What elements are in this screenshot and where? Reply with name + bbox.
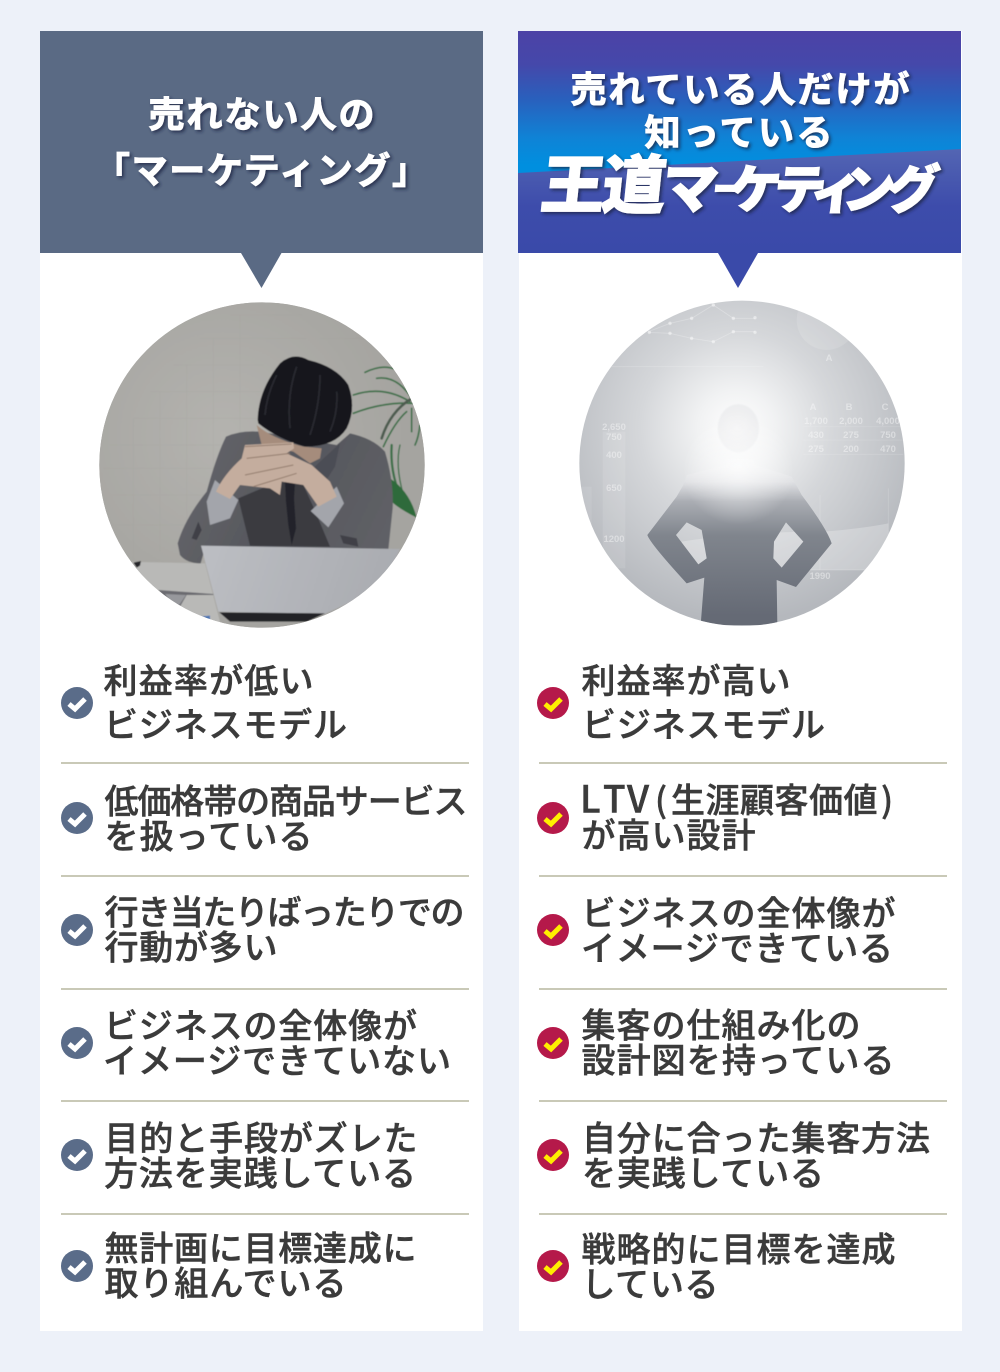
photo: silhouette with data overlay: 2,000 xyxy=(839,416,863,427)
photo: silhouette with data overlay xyxy=(577,290,905,626)
header: successful: ケティング xyxy=(725,149,943,224)
row 6: 戦略的に目標を達成 xyxy=(582,1232,896,1270)
row 2: が高い設計 xyxy=(582,818,756,856)
row 6 xyxy=(61,1230,416,1304)
laptop xyxy=(201,546,400,614)
row 5 xyxy=(537,1120,930,1194)
photo: businessman with head in hands xyxy=(97,302,430,635)
checklist: successful xyxy=(537,663,947,1304)
row 4: 設計図を持っている xyxy=(582,1042,894,1080)
row 2: LTV xyxy=(580,770,650,824)
row 2: (生涯顧客価値) xyxy=(655,774,893,822)
photo: silhouette with data overlay: 1200 xyxy=(603,534,625,545)
header: unsuccessful: 売れない人の xyxy=(148,94,374,135)
photo: silhouette with data overlay: 200 xyxy=(843,444,859,455)
face xyxy=(257,425,322,463)
header: successful: マ xyxy=(658,144,723,225)
header: unsuccessful xyxy=(40,31,483,288)
header: successful: 王道 xyxy=(537,135,672,227)
row 1: ビジネスモデル xyxy=(582,707,825,745)
row 3: イメージできている xyxy=(581,930,893,968)
row 2: を扱っている xyxy=(104,818,312,856)
photo: silhouette with data overlay: A xyxy=(826,353,833,364)
photo: silhouette with data overlay: 400 xyxy=(606,450,622,461)
row 2 xyxy=(537,770,893,856)
row 6 xyxy=(537,1232,896,1304)
hair xyxy=(258,357,352,447)
header: successful: 売れている人だけが xyxy=(570,69,910,110)
photo: silhouette with data overlay: 470 xyxy=(880,444,896,455)
panel: unsuccessful marketing xyxy=(40,31,483,1331)
row 4 xyxy=(61,1008,451,1081)
photo: silhouette with data overlay: 275 xyxy=(808,444,825,455)
row 5: 目的と手段がズレた xyxy=(104,1120,418,1158)
row 6: 無計画に目標達成に xyxy=(104,1230,416,1268)
photo: silhouette with data overlay: 1500 xyxy=(730,571,752,582)
shirt cuffs xyxy=(207,480,238,525)
row 6: 取り組んでいる xyxy=(104,1266,346,1304)
row 4 xyxy=(537,1008,894,1080)
checklist: unsuccessful xyxy=(61,663,469,1304)
photo: silhouette with data overlay: 1,700 xyxy=(804,416,828,427)
row 3 xyxy=(61,894,464,968)
row 3: 行動が多い xyxy=(104,930,278,968)
row 5 xyxy=(61,1120,418,1194)
photo: silhouette with data overlay: 650 xyxy=(606,483,622,494)
row 5: を実践している xyxy=(582,1156,824,1194)
plant xyxy=(353,367,420,495)
row 2: 低価格帯の商品サービス xyxy=(104,784,468,822)
photo: silhouette with data overlay: 430 xyxy=(808,430,824,441)
photo: silhouette with data overlay: 275 xyxy=(843,430,860,441)
row 6: している xyxy=(582,1266,718,1304)
row 2 xyxy=(61,784,468,856)
row 4: ビジネスの全体像が xyxy=(104,1008,417,1046)
suit xyxy=(178,431,393,563)
photo: silhouette with data overlay: 750 xyxy=(606,432,622,443)
header: successful: 知っている xyxy=(644,112,832,153)
photo: silhouette with data overlay: A xyxy=(810,402,817,413)
row 4: 集客の仕組み化の xyxy=(582,1008,860,1046)
silhouette xyxy=(647,484,832,625)
row 1: 利益率が高い xyxy=(582,663,790,701)
hands xyxy=(216,442,337,507)
photo: silhouette with data overlay: 1990 xyxy=(809,571,831,582)
row 3 xyxy=(537,896,896,968)
row 1: 利益率が低い xyxy=(104,663,314,701)
desk xyxy=(132,562,220,622)
photo: silhouette with data overlay: 2,650 xyxy=(602,422,626,433)
photo: silhouette with data overlay: 4,000 xyxy=(876,416,900,427)
row 5: 方法を実践している xyxy=(104,1156,416,1194)
panel: successful marketing xyxy=(518,31,962,1331)
photo: silhouette with data overlay: B xyxy=(846,402,853,413)
header: unsuccessful: 「マーケティング」 xyxy=(94,150,428,191)
photo: silhouette with data overlay: 750 xyxy=(880,430,896,441)
row 1 xyxy=(537,663,825,745)
header: successful xyxy=(518,31,961,288)
header: successful: ー xyxy=(714,173,737,202)
row 1: ビジネスモデル xyxy=(104,707,347,745)
photo: silhouette with data overlay: C xyxy=(882,402,889,413)
row 3: 行き当たりばったりでの xyxy=(104,894,464,932)
row 3: ビジネスの全体像が xyxy=(582,896,896,934)
data overlay xyxy=(612,304,903,570)
row 4: イメージできていない xyxy=(103,1043,451,1081)
row 5: 自分に合った集客方法 xyxy=(582,1120,930,1158)
row 1 xyxy=(61,663,347,745)
